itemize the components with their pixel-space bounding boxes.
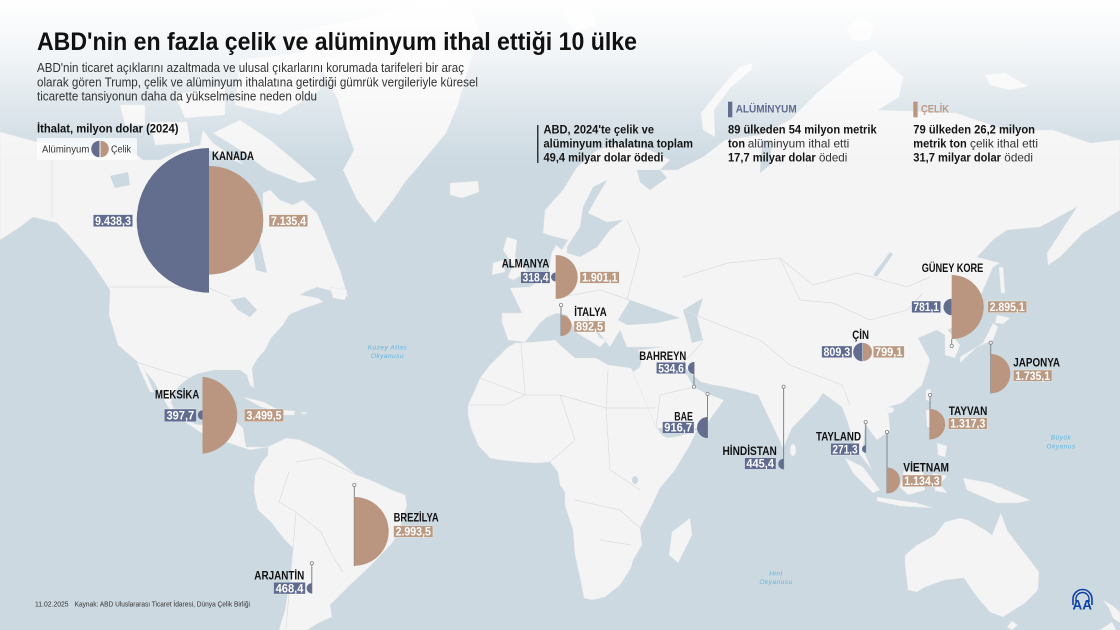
country: Çin: ÇİN: [852, 327, 869, 342]
country: Meksika: [155, 377, 284, 454]
country: BAE: BAE: [674, 409, 693, 423]
callout: steel: ÇELİK: [921, 103, 949, 116]
subtitle: olarak gören Trump, çelik ve alüminyum ithalatına getirdiği gümrük vergileriyle küresel: [37, 75, 478, 89]
subtitle: [37, 61, 478, 103]
country: Çin: 799,1: [875, 345, 903, 359]
legend: Alüminyum: [42, 143, 90, 155]
top white fade: [0, 0, 1120, 165]
country: Vietnam: VİETNAM: [903, 460, 949, 475]
callout: steel: metrik ton: [913, 136, 967, 150]
country: Japonya: [989, 341, 1060, 394]
subtitle: ABD'nin ticaret açıklarını azaltmada ve ulusal çıkarlarını korumada tarifeleri bir araç: [37, 61, 464, 75]
country: Güney Kore: GÜNEY KORE: [922, 260, 983, 275]
callout: steel: 79 ülkeden 26,2 milyon: [913, 122, 1035, 136]
callout: aluminium: ALÜMİNYUM: [736, 103, 797, 116]
callout: aluminium: 89 ülkeden 54 milyon metrik: [728, 122, 877, 136]
callout: total payment: [537, 122, 693, 164]
callout: aluminium: [728, 102, 877, 164]
callout: steel: çelik ithal etti: [970, 136, 1038, 150]
country: Kanada: [93, 148, 308, 293]
country: Kanada: KANADA: [212, 149, 254, 163]
country: Brezilya: [353, 483, 439, 566]
country: Vietnam: [885, 430, 949, 494]
country: Almanya: 318,4: [522, 271, 549, 285]
ocean label: North Atlantic: Okyanusu: [371, 353, 404, 360]
country: Kanada: 9.438,3: [95, 214, 131, 228]
callout: steel: [913, 102, 1038, 164]
callout: aluminium: ödedi: [819, 150, 847, 164]
icon: AA logo: [1072, 590, 1092, 612]
ocean labels: [368, 344, 1076, 586]
ocean label: Pacific: Büyük: [1051, 434, 1071, 442]
country borders: [52, 160, 930, 628]
callout: aluminium: ton: [728, 136, 745, 150]
country: Güney Kore: [912, 260, 1027, 348]
country: Japonya: 1.735,1: [1015, 369, 1050, 383]
land: South America: [254, 438, 407, 630]
callout: steel: 31,7 milyar dolar: [913, 150, 1001, 164]
land: Baja California: [137, 363, 154, 392]
legend: [37, 138, 137, 160]
country: İtalya: 892,5: [576, 320, 603, 334]
country: Arjantin: [254, 562, 313, 595]
country: Bahreyn: BAHREYN: [639, 349, 686, 363]
callout: total payment: ABD, 2024'te çelik ve: [544, 122, 654, 136]
country: Brezilya: BREZİLYA: [394, 510, 439, 525]
country: Meksika: 397,7: [166, 409, 194, 423]
country: Bahreyn: [639, 349, 696, 388]
country: Tayvan: [928, 393, 987, 440]
ocean label: Indian: Hint: [769, 570, 783, 578]
callout: aluminium: 17,7 milyar dolar: [728, 150, 816, 164]
country: Japonya: JAPONYA: [1013, 356, 1060, 370]
country: Hindistan: HİNDİSTAN: [722, 443, 777, 458]
callout: total payment: 49,4 milyar dolar ödedi: [544, 150, 664, 164]
legend: Çelik: [111, 143, 132, 155]
ocean label: Pacific: Okyanus: [1046, 444, 1076, 450]
country: Tayland: [816, 420, 867, 456]
country: Arjantin: 468,4: [276, 581, 304, 595]
source line: Kaynak: ABD Uluslararası Ticaret İdaresi, Dünya Çelik Birliği: [75, 600, 250, 609]
land: Australia: [905, 513, 1039, 617]
country: Tayland: 271,3: [832, 442, 858, 456]
inland waters: [110, 140, 893, 484]
country: Hindistan: 445,4: [746, 457, 774, 471]
country: Bahreyn: 534,6: [658, 361, 684, 375]
land: Greenland: [286, 0, 479, 223]
callout: steel: ödedi: [1004, 150, 1033, 164]
country: BAE: 916,7: [664, 421, 692, 435]
country: BAE: [662, 392, 709, 438]
country: Arjantin: ARJANTİN: [254, 567, 304, 582]
country: Çin: 809,3: [824, 345, 850, 359]
country: Güney Kore: 781,1: [913, 300, 939, 314]
country: Güney Kore: 2.895,1: [990, 300, 1025, 314]
callout: total payment: alüminyum ithalatına toplam: [544, 136, 693, 150]
country: Brezilya: 2.993,5: [396, 525, 431, 539]
legend heading: İthalat, milyon dolar (2024): [37, 121, 178, 136]
country: Tayvan: 1.317,3: [950, 417, 986, 431]
country: Tayvan: TAYVAN: [949, 404, 987, 418]
subtitle: ticarette tansiyonun daha da yükselmesine neden oldu: [37, 89, 317, 103]
country: Çin: [822, 327, 904, 361]
country: Almanya: [502, 255, 619, 299]
ocean label: North Atlantic: Kuzey Atlas: [368, 344, 407, 352]
land: Africa: [468, 340, 697, 600]
country: Almanya: ALMANYA: [502, 257, 550, 271]
icon: AA logo: AA: [1072, 596, 1092, 612]
ocean label: Indian: Okyanusu: [759, 579, 793, 586]
country: Meksika: 3.499,5: [246, 409, 282, 423]
land: North America: [0, 130, 348, 450]
country: Meksika: MEKSİKA: [155, 386, 200, 401]
country: İtalya: İTALYA: [574, 304, 607, 319]
country: Almanya: 1.901,1: [582, 271, 618, 285]
title: ABD'nin en fazla çelik ve alüminyum ithal ettiği 10 ülke: [37, 28, 637, 56]
country: Tayland: TAYLAND: [816, 429, 861, 443]
country: Kanada: 7.135,4: [271, 214, 306, 228]
country: İtalya: [559, 303, 607, 336]
source line: [35, 600, 250, 609]
source line: 11.02.2025: [35, 602, 69, 609]
callout: aluminium: alüminyum ithal etti: [748, 136, 849, 150]
country: Hindistan: [722, 385, 785, 471]
land: Eurasia: [502, 50, 1120, 470]
country: Vietnam: 1.134,3: [904, 474, 940, 488]
